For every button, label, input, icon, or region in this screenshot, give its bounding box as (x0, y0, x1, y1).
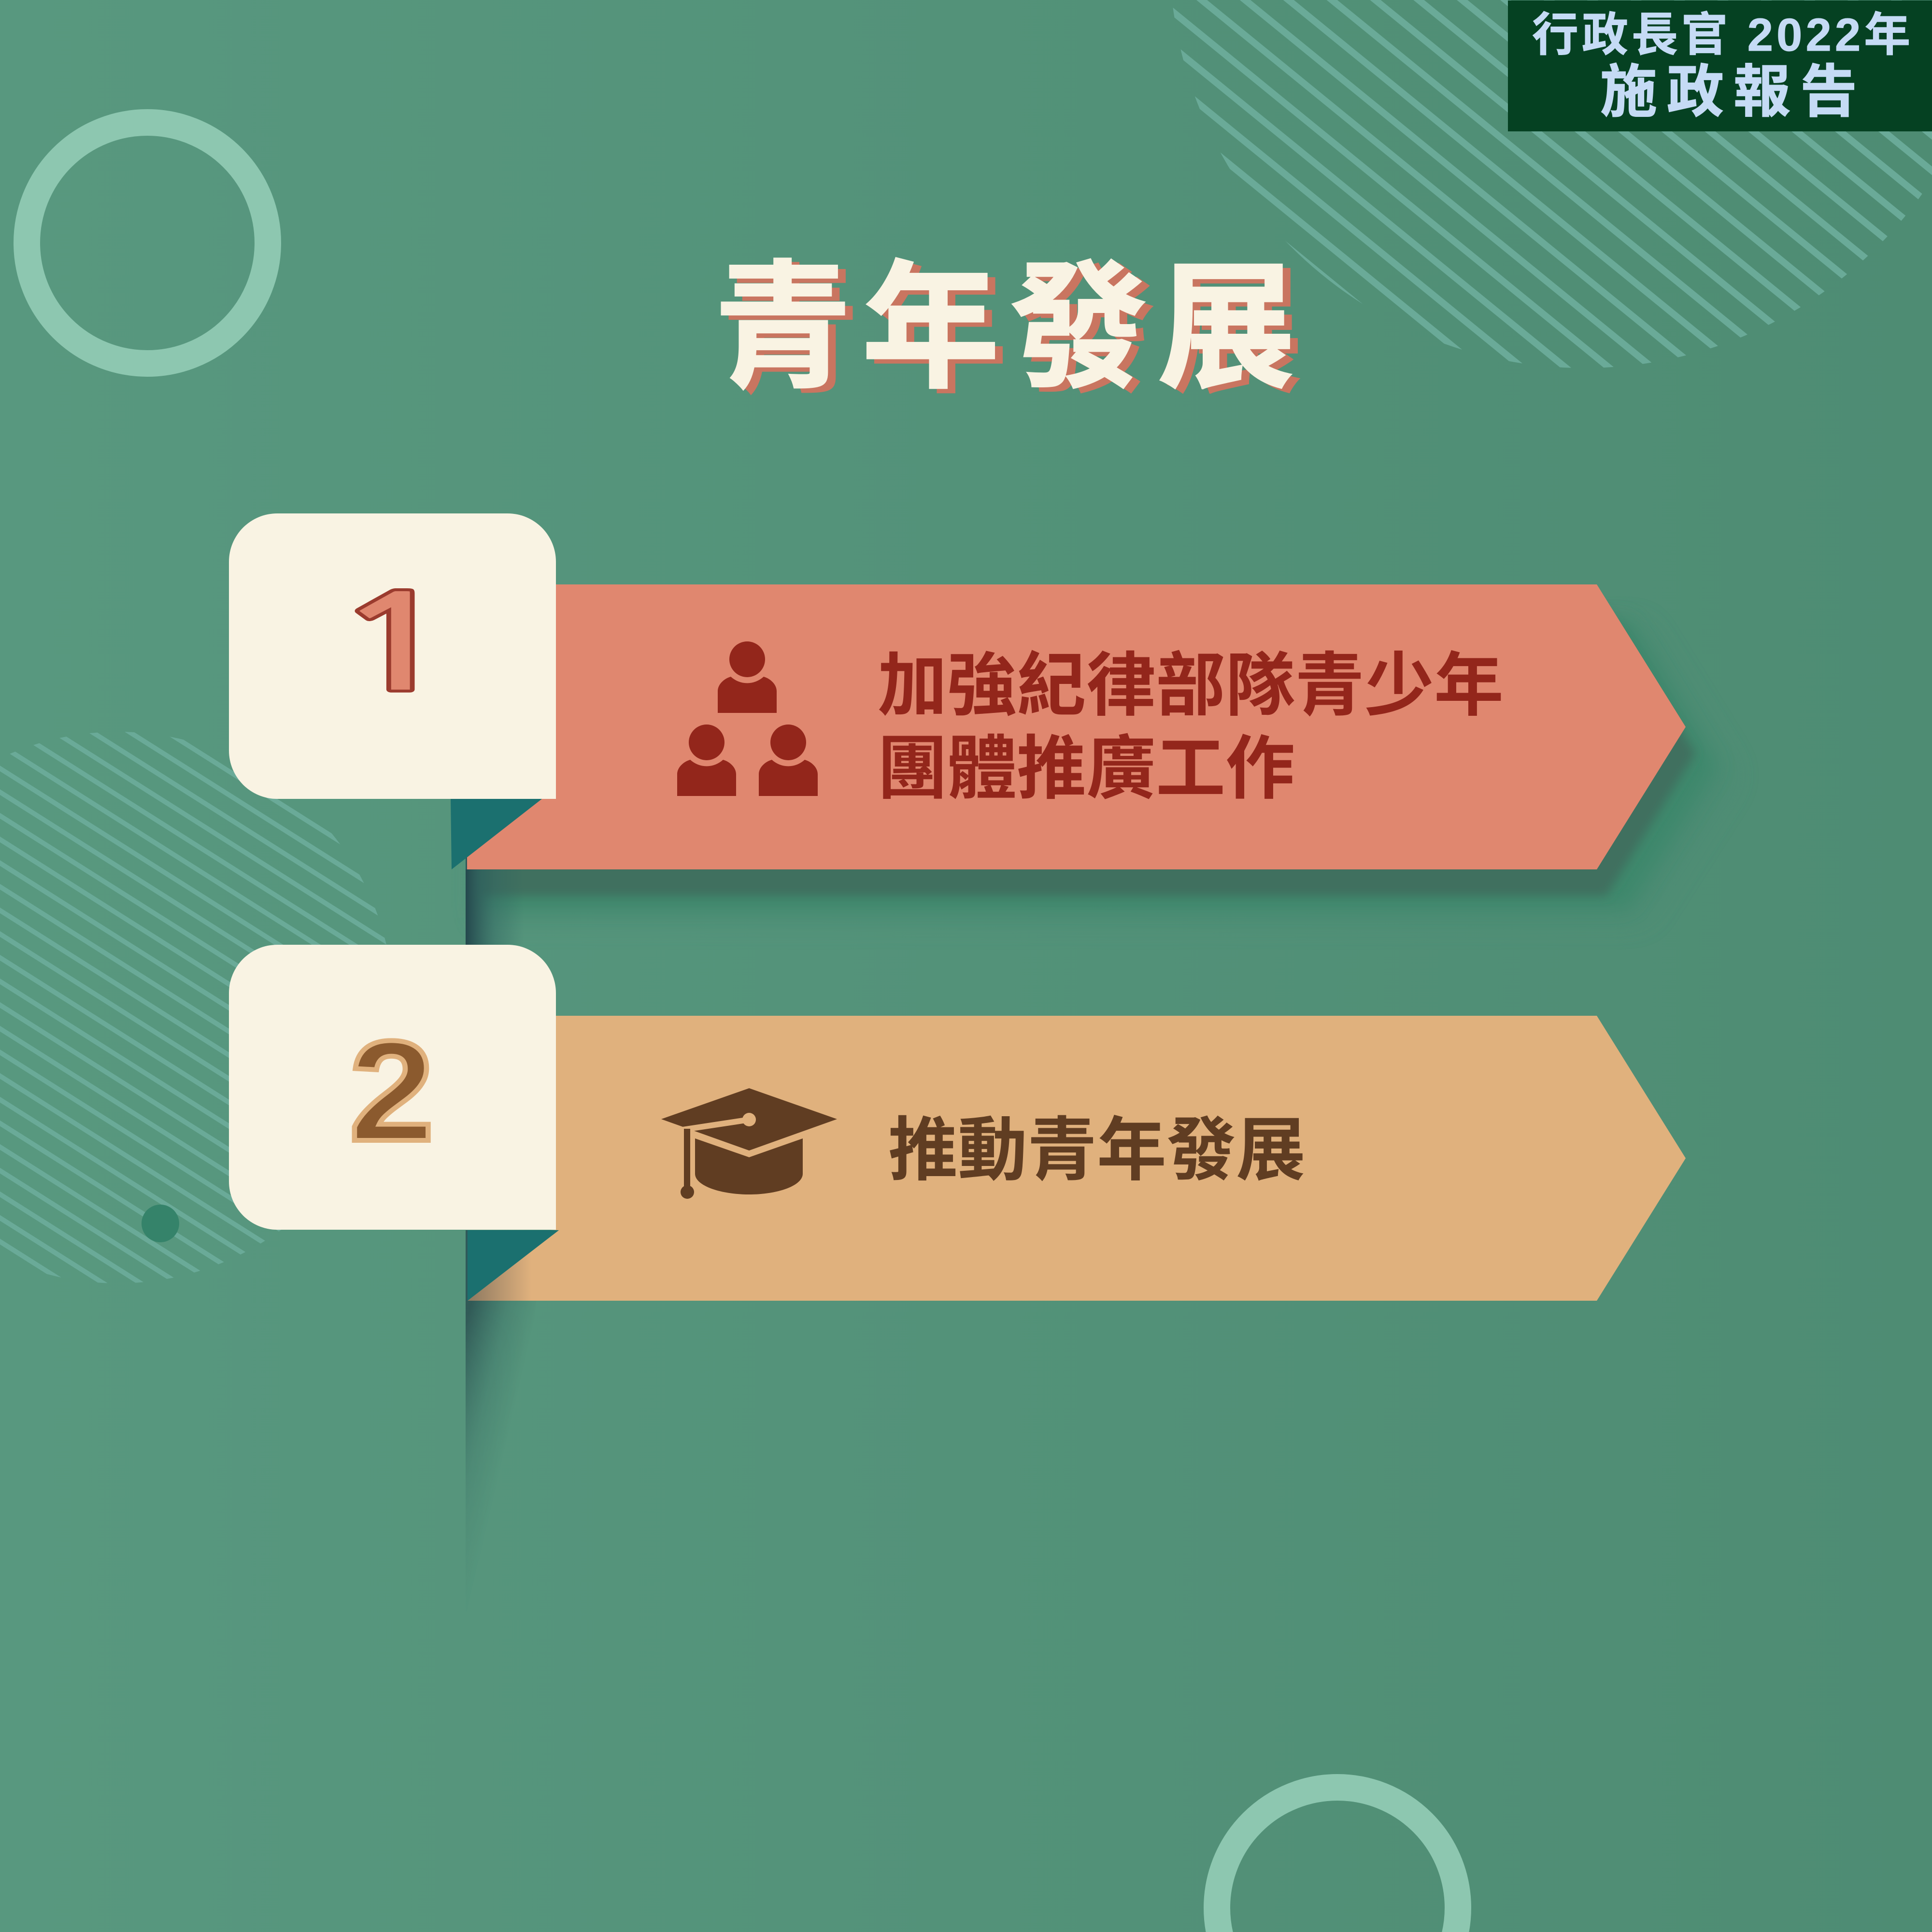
striped circle: left (0, 732, 386, 1283)
ribbon 2 fold (466, 1230, 559, 1301)
ribbon 1 text (878, 647, 1504, 808)
ribbon 1 text: 加強紀律部隊青少年 (878, 647, 1504, 724)
title: 青年發展 (722, 255, 1313, 410)
icon: graduation cap (661, 1088, 837, 1199)
ribbon 1 text: 團體推廣工作 (878, 730, 1295, 808)
shadow: ribbon 1 outer glow (483, 628, 1732, 918)
ribbon 1 fold edge (466, 857, 467, 869)
number card 1 (229, 513, 556, 799)
ring: bottom (1217, 1787, 1458, 1932)
side shadow: below ribbon 1 (466, 869, 528, 945)
ring: top left (27, 123, 268, 363)
number 2: 2 (349, 1011, 434, 1171)
fold edge (466, 1230, 468, 1301)
icon: people (677, 641, 818, 796)
side shadow: below ribbon 2 (466, 1301, 525, 1514)
header line 1: 行政長官 2022年 (1532, 9, 1914, 61)
number 1: 1 (329, 579, 462, 711)
ribbon 2 group (466, 1016, 1686, 1301)
ribbon 2 text: 推動青年發展 (888, 1111, 1306, 1189)
header line 2: 施政報告 (1600, 60, 1867, 124)
ribbon 1 group (451, 584, 1686, 869)
shadow: ribbon 1 glow (483, 621, 1717, 908)
ribbon 2 body (468, 1016, 1686, 1301)
striped circle: top right (1173, 0, 1932, 368)
dot (142, 1205, 179, 1242)
shadow: ribbon 1 core (483, 611, 1695, 896)
ribbon 1 fold (451, 799, 542, 869)
title: 青年發展 (714, 251, 1305, 405)
number card 2 (229, 945, 556, 1230)
header badge (1508, 0, 1932, 131)
ribbon 1 body (467, 584, 1686, 869)
